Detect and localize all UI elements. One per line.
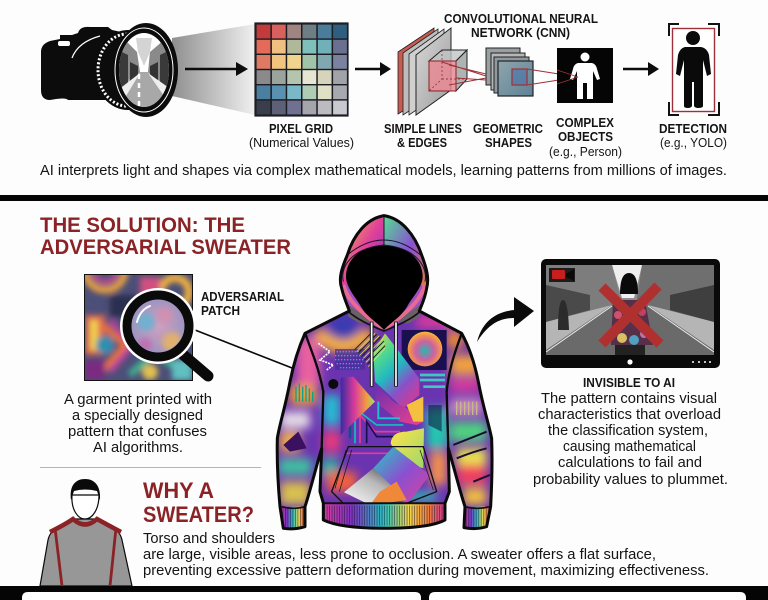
text: why a sweater explanation xyxy=(143,531,709,579)
footer band xyxy=(0,586,768,600)
heading: the solution: ADVERSARIAL SWEATER xyxy=(40,236,291,259)
label: adversarial patch xyxy=(201,290,284,318)
label: geometric shapes xyxy=(473,122,543,150)
icon: complex object person xyxy=(557,48,613,103)
heading: the solution: THE SOLUTION: THE xyxy=(40,214,245,237)
heading: CNN: CONVOLUTIONAL NEURAL xyxy=(444,12,598,26)
heading: why a sweater xyxy=(143,478,254,527)
text: invisible to AI: characteristics that overload xyxy=(538,407,721,423)
diagram: CNN layers xyxy=(398,28,578,115)
icon: video screen with crossed-out figure xyxy=(541,259,720,368)
text: why a sweater explanation: Torso and shoulders xyxy=(143,531,275,547)
heading: why a sweater: SWEATER? xyxy=(143,502,254,527)
text: garment description: AI algorithms. xyxy=(93,440,183,456)
arrow: camera to grid xyxy=(185,62,248,76)
label: complex objects: (e.g., Person) xyxy=(549,145,622,159)
label: adversarial patch: ADVERSARIAL xyxy=(201,290,284,304)
icon: adversarial patch with magnifier xyxy=(84,274,214,382)
heading: CNN: NETWORK (CNN) xyxy=(471,26,570,40)
panel: how AI sees xyxy=(40,12,727,179)
caption: AI interprets light and shapes via complex mathematical models, learning patterns from millions of images. xyxy=(40,162,727,179)
label: detection xyxy=(659,122,727,150)
text: invisible to AI: causing mathematical xyxy=(563,439,696,455)
label: pixel grid: (Numerical Values) xyxy=(249,136,354,150)
label: simple lines: SIMPLE LINES xyxy=(384,122,462,136)
heading: the solution xyxy=(40,214,291,259)
heading: CNN xyxy=(444,12,598,40)
chart: pixel grid xyxy=(255,23,348,116)
label: adversarial patch: PATCH xyxy=(201,304,240,318)
label: detection: (e.g., YOLO) xyxy=(660,136,727,150)
illustration: rainbow hoodie xyxy=(273,212,497,532)
icon: person wearing sweater xyxy=(40,479,132,586)
text: invisible to AI: probability values to plummet. xyxy=(533,472,728,488)
label: complex objects: COMPLEX xyxy=(556,116,615,130)
text: why a sweater explanation: preventing excessive pattern deformation during movement, maximizing effectiveness. xyxy=(143,563,709,579)
label: complex objects: OBJECTS xyxy=(558,130,613,144)
text: invisible to AI: INVISIBLE TO AI xyxy=(583,376,675,390)
label: geometric shapes: GEOMETRIC xyxy=(473,122,543,136)
label: pixel grid xyxy=(249,122,354,150)
label: simple lines: & EDGES xyxy=(397,136,447,150)
text: invisible to AI: The pattern contains visual xyxy=(541,391,717,407)
text: why a sweater explanation: are large, visible areas, less prone to occlusion. A sweater offers a flat surface, xyxy=(143,547,656,563)
arrow: CNN to detection xyxy=(623,62,659,76)
label: simple lines xyxy=(384,122,462,150)
arrow: grid to CNN xyxy=(355,62,391,76)
callout line: patch to hoodie xyxy=(195,330,333,384)
text: invisible to AI: the classification system, xyxy=(548,423,708,439)
label: detection: DETECTION xyxy=(659,122,727,136)
icon: detection person xyxy=(669,24,719,115)
heading: why a sweater: WHY A xyxy=(143,478,214,503)
arrow: hoodie to screen xyxy=(477,297,534,342)
text: invisible to AI: calculations to fail and xyxy=(558,455,702,471)
label: geometric shapes: SHAPES xyxy=(485,136,532,150)
text: garment description: A garment printed with xyxy=(64,392,212,408)
text: garment description: a specially designed xyxy=(72,408,203,424)
text: invisible to AI xyxy=(533,376,728,488)
text: garment description: pattern that confuses xyxy=(68,424,207,440)
text: garment description xyxy=(64,392,212,456)
label: complex objects xyxy=(549,116,622,159)
label: pixel grid: PIXEL GRID xyxy=(269,122,333,136)
icon: camera xyxy=(41,23,255,117)
